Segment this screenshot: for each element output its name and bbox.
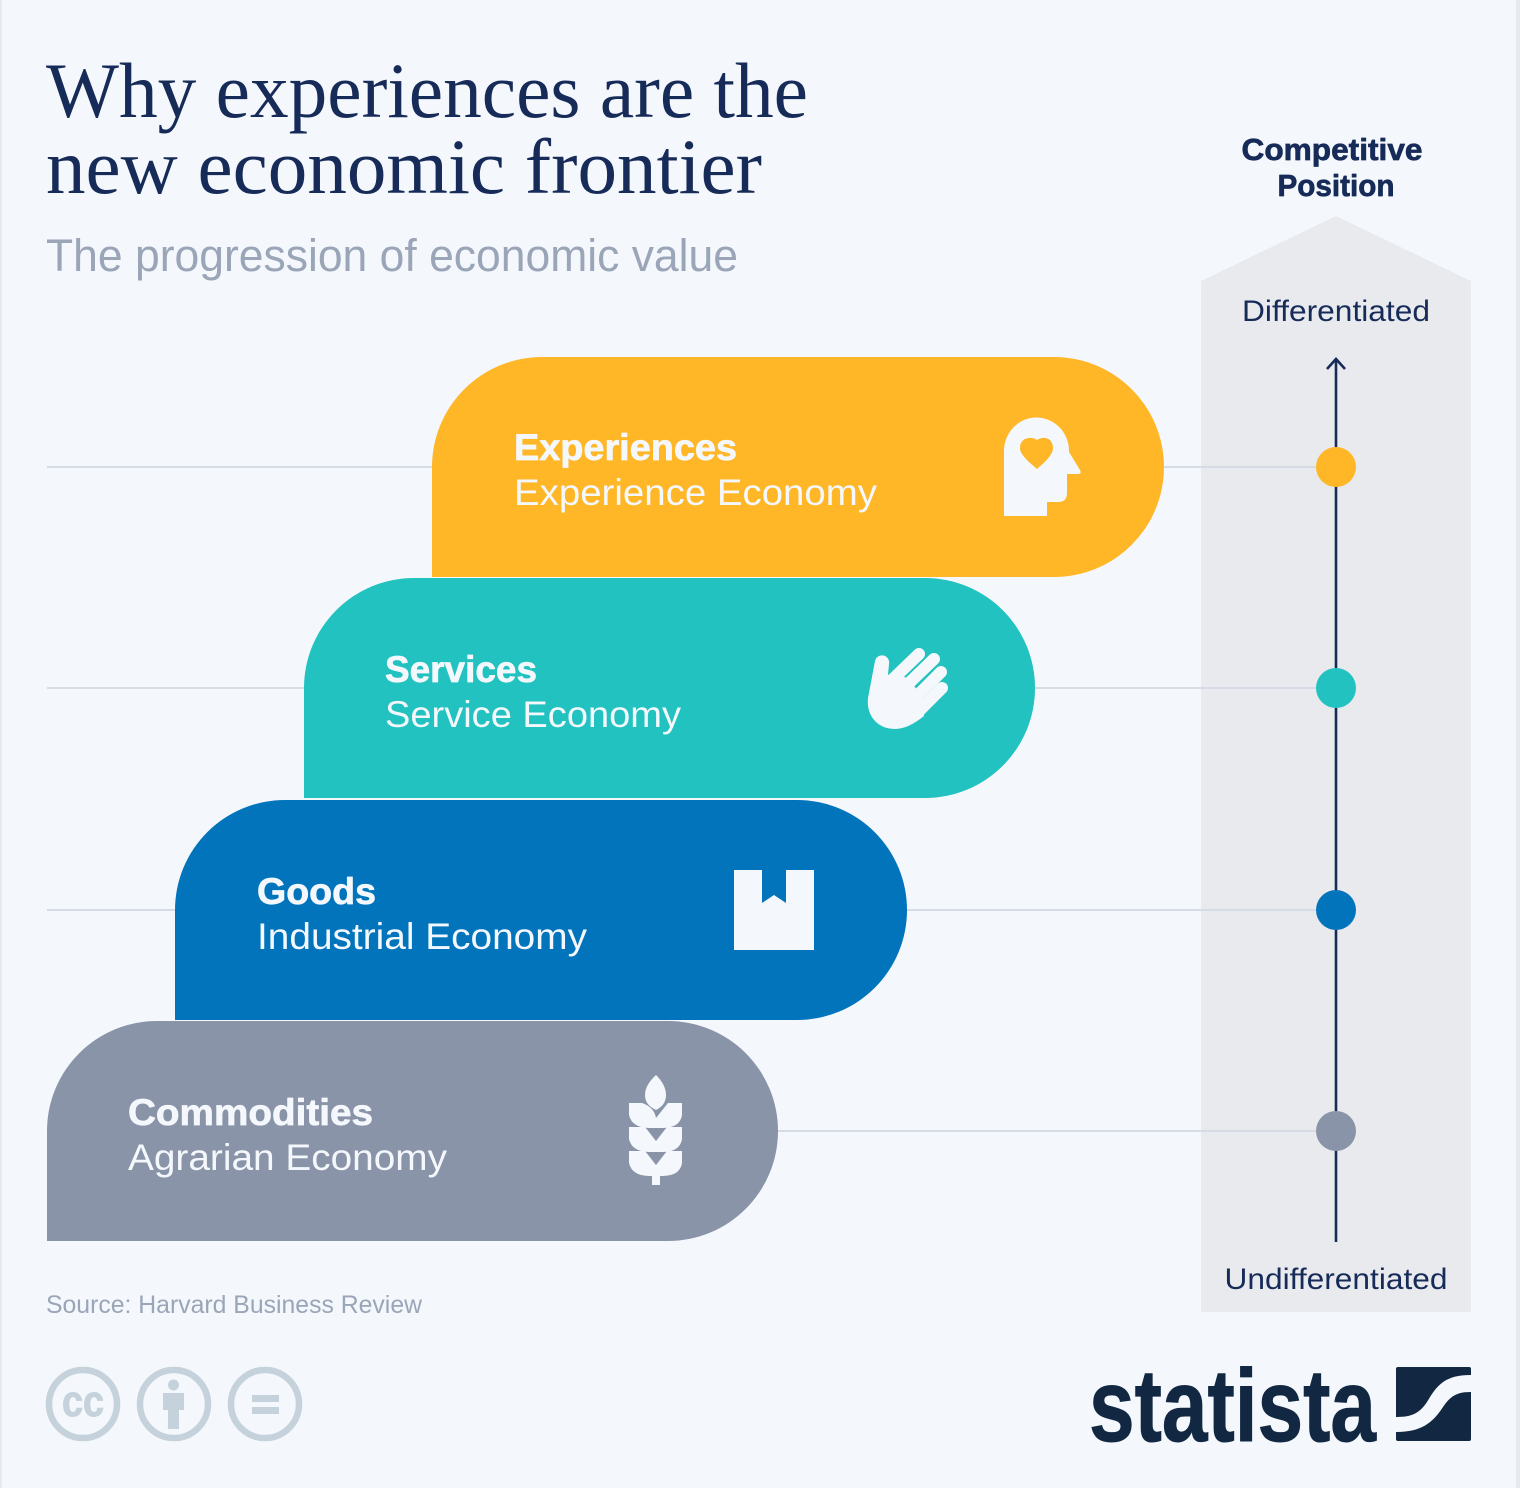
label: undifferentiated: Undifferentiated (1224, 1263, 1448, 1296)
panel: services (304, 578, 1035, 798)
panel: goods (175, 800, 907, 1020)
text: services: Service Economy (385, 694, 682, 735)
text: commodities: Commodities (128, 1092, 373, 1133)
logo mark (1396, 1367, 1471, 1441)
icon: cc: cc (62, 1377, 104, 1426)
icon: no derivatives (231, 1370, 299, 1438)
axis arrow (1327, 359, 1345, 1242)
heading: competitive position (1242, 132, 1422, 203)
source: Source: Harvard Business Review (46, 1291, 423, 1319)
logo: statista (1089, 1348, 1471, 1463)
connector lines (47, 467, 1320, 1131)
axis markers (1316, 447, 1356, 1151)
text: goods (257, 871, 588, 957)
text: services (385, 649, 682, 735)
text: commodities (128, 1092, 448, 1178)
text: experiences (514, 427, 878, 513)
logo wordmark: statista (1089, 1348, 1377, 1463)
text: commodities: Agrarian Economy (128, 1137, 448, 1178)
icon: wheat (629, 1075, 682, 1185)
icon: hand (868, 654, 942, 729)
panel: commodities (47, 1021, 778, 1241)
text: goods: Industrial Economy (257, 916, 588, 957)
panel: experiences (432, 357, 1164, 577)
title: new economic frontier (46, 123, 762, 210)
icon: attribution (140, 1370, 208, 1438)
text: experiences: Experience Economy (514, 472, 878, 513)
panel: competitive position arrow background (1201, 216, 1471, 1312)
label: differentiated: Differentiated (1242, 295, 1430, 328)
text: goods: Goods (257, 871, 376, 912)
icon: head with heart (1004, 418, 1081, 516)
heading: competitive position: Position (1278, 168, 1394, 203)
subtitle: The progression of economic value (46, 230, 738, 281)
icon: cc (49, 1370, 117, 1438)
title: Why experiences are the (46, 47, 808, 134)
heading: competitive position: Competitive (1242, 132, 1422, 167)
text: experiences: Experiences (514, 427, 737, 468)
text: services: Services (385, 649, 537, 690)
icon: box (734, 870, 814, 950)
title (46, 47, 808, 210)
icon: creative commons licence (49, 1370, 299, 1438)
